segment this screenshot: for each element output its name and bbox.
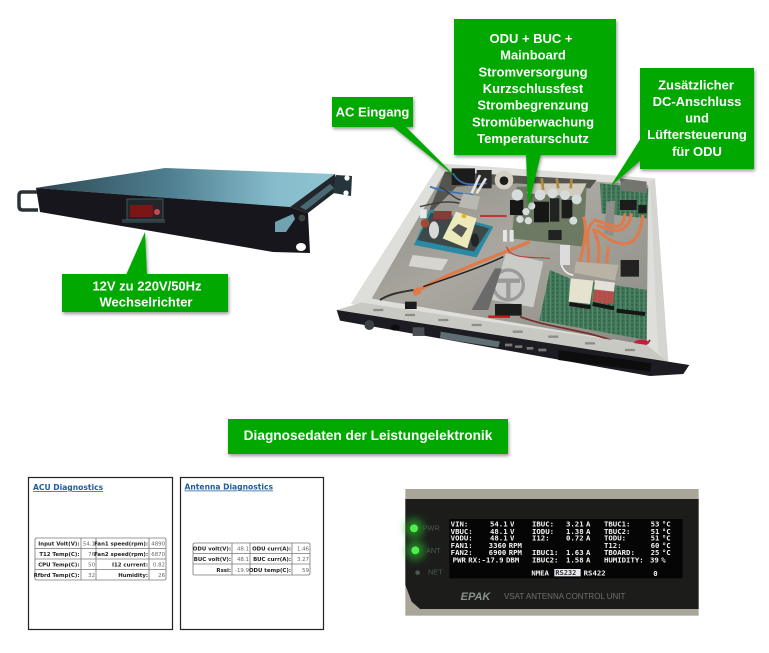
status LEDs: NET: [428, 568, 443, 577]
status LEDs: PWR: [423, 524, 440, 533]
label sticker: [409, 255, 448, 271]
table: antenna values: ODU curr(A):: [252, 546, 291, 552]
oled screen: 3360 RPM: [489, 541, 523, 550]
oled screen: 39 %: [650, 555, 666, 564]
oled screen: TBUC1:: [604, 520, 630, 529]
oled screen: VBUC:: [451, 527, 473, 536]
oled screen: 60 °C: [651, 541, 671, 550]
oled screen: 1.38 A: [566, 527, 591, 536]
callout: additional DC connection: für ODU: [672, 144, 722, 159]
oled screen: 0.72 A: [566, 534, 591, 543]
table: antenna values: 1.46: [297, 546, 310, 552]
callout: additional DC connection: [610, 68, 754, 187]
callout: additional DC connection: Zusätzlicher: [658, 78, 734, 92]
table: ACU values: CPU Temp(C):: [38, 562, 80, 568]
oled screen: PWR RX:-17.9 DBM: [453, 555, 520, 564]
oled screen: IBUC:: [532, 520, 554, 529]
callout: inverter: 12V zu 220V/50Hz: [92, 278, 202, 294]
table: ACU values: Rfbrd Temp(C):: [34, 573, 80, 579]
oled screen: NMEA: [531, 568, 550, 577]
panel: ACU diagnostics: ACU Diagnostics: [33, 483, 104, 492]
photo: ACU front display: [404, 489, 699, 616]
oled screen: 48.1 V: [490, 527, 515, 536]
table: antenna values: 48.1: [237, 557, 249, 563]
table: ACU values: Fan2 speed(rpm):: [94, 552, 148, 558]
oled screen: 25 °C: [651, 548, 671, 557]
oled screen: FAN1:: [451, 541, 473, 550]
callout: additional DC connection: DC-Anschluss: [653, 94, 741, 109]
heading: diagnostics: [228, 419, 508, 454]
table: antenna values: ODU temp(C):: [249, 568, 291, 574]
oled screen: TODU:: [604, 534, 626, 543]
table: antenna values: [193, 543, 310, 575]
icon: left rack handle: [19, 192, 38, 210]
callout: power supply features: Kurzschlussfest: [483, 81, 584, 96]
table: ACU values: Humidity:: [118, 573, 148, 579]
table: ACU values: Input Volt(V):: [38, 542, 80, 548]
status LEDs: [404, 518, 443, 577]
inverter display: [122, 199, 165, 223]
oled screen: IBUC2:: [532, 555, 558, 564]
table: ACU values: 26: [158, 573, 166, 579]
callout: power supply features: Mainboard: [500, 48, 566, 63]
table: ACU values: 54.1: [83, 542, 95, 548]
oled screen: 51 °C: [651, 534, 671, 543]
oled screen: 53 °C: [651, 520, 671, 529]
dc connector board: [600, 178, 648, 237]
oled screen: FAN2:: [451, 548, 473, 557]
table: ACU values: 0.82: [153, 562, 165, 568]
oled screen: VIN:: [451, 520, 468, 529]
table: ACU values: T12 Temp(C):: [39, 552, 80, 558]
table: antenna values: 3.27: [297, 557, 309, 563]
table: antenna values: -19.9: [235, 568, 250, 574]
table: antenna values: BUC volt(V):: [194, 557, 231, 563]
oled screen: 3.21 A: [566, 520, 591, 529]
table: antenna values: 59: [302, 568, 310, 574]
oled screen: HUMIDITY:: [604, 555, 644, 564]
table: ACU values: I12 current:: [112, 562, 148, 568]
icon: rear rack ear: [333, 175, 352, 196]
oled screen: 1.58 A: [566, 555, 591, 564]
table: ACU values: 6870: [151, 552, 166, 558]
photo: closed rack inverter: [19, 168, 352, 253]
callout: power supply features: Stromversorgung: [478, 64, 588, 79]
table: ACU values: 32: [88, 573, 95, 579]
photo: opened power unit: [337, 163, 689, 376]
panel: ACU diagnostics: [28, 478, 172, 630]
oled screen: IBUC1:: [532, 548, 558, 557]
icon: right rack handle: [275, 214, 295, 232]
oled screen: 51 °C: [651, 527, 671, 536]
front panel: [337, 310, 689, 376]
oled screen: TBOARD:: [604, 548, 635, 557]
green router board: [520, 270, 650, 346]
main board with capacitors: [480, 178, 587, 247]
oled screen: 6900 RPM: [489, 548, 523, 557]
table: ACU values: Fan1 speed(rpm):: [94, 542, 148, 548]
oled screen: 48.1 V: [490, 534, 515, 543]
oled screen: I12:: [532, 534, 550, 543]
orange network cables: [413, 213, 643, 293]
table: ACU values: 50: [88, 562, 96, 568]
heading: diagnostics: Diagnosedaten der Leistungelektronik: [244, 428, 493, 443]
callout: power supply features: [454, 19, 616, 207]
callout: inverter: Wechselrichter: [100, 294, 192, 310]
callout: power supply features: Strombegrenzung: [477, 98, 589, 113]
callout: additional DC connection: und: [685, 110, 709, 126]
oled screen: IODU:: [532, 527, 554, 536]
ribbon and left wiring: [380, 290, 413, 300]
callout: additional DC connection: Lüftersteuerung: [647, 127, 747, 142]
callout: AC Eingang: AC Eingang: [336, 104, 409, 120]
oled screen: T12:: [604, 541, 622, 550]
panel: antenna diagnostics: Antenna Diagnostics: [184, 482, 273, 492]
oled screen: TBUC2:: [604, 527, 630, 536]
ac input socket: [420, 168, 513, 207]
oled screen: RS422: [584, 568, 606, 577]
table: antenna values: Rssi:: [216, 568, 231, 574]
network switch block: [560, 245, 639, 281]
oled screen: 54.1 V: [490, 520, 515, 529]
callout: inverter: [62, 232, 228, 312]
table: ACU values: [34, 538, 166, 580]
table: ACU values: 76: [88, 552, 96, 558]
ssd drive: [423, 247, 550, 317]
oled screen: 0: [653, 569, 658, 578]
table: antenna values: 48.1: [237, 546, 249, 552]
oled screen: VODU:: [451, 534, 473, 543]
oled screen: 1.63 A: [566, 548, 591, 557]
callout: power supply features: Temperaturschutz: [477, 131, 589, 146]
brand logo: EPAK: [461, 591, 491, 603]
panel: antenna diagnostics: [180, 478, 324, 630]
status LEDs: ANT: [426, 546, 441, 555]
callout: AC Eingang: [332, 97, 458, 179]
unit caption: VSAT ANTENNA CONTROL UNIT: [504, 592, 626, 601]
power supply board: [414, 193, 493, 257]
callout: power supply features: ODU + BUC +: [489, 31, 573, 46]
callout: power supply features: Stromüberwachung: [472, 114, 594, 129]
table: antenna values: BUC curr(A):: [253, 557, 291, 563]
table: antenna values: ODU volt(V):: [193, 546, 231, 552]
table: ACU values: 4890: [151, 542, 166, 548]
oled screen: RS232: [555, 569, 576, 577]
oled screen: [449, 519, 683, 578]
